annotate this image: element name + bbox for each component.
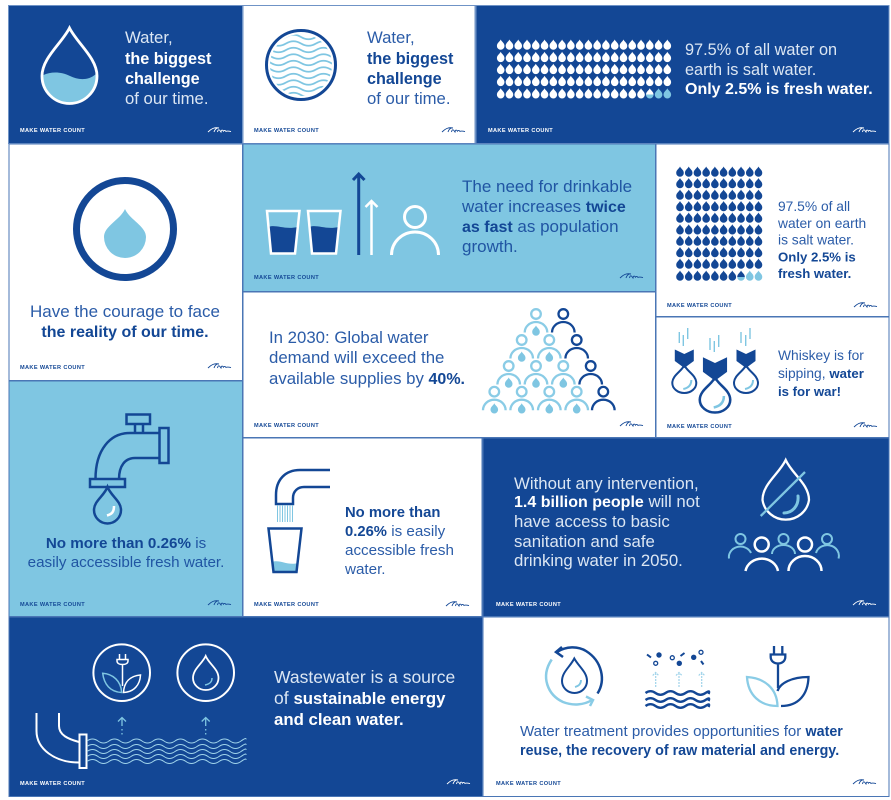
logo mark <box>853 780 876 784</box>
water waves <box>87 738 246 764</box>
logo mark <box>446 602 469 606</box>
panel: 2030 demand, white <box>243 292 656 438</box>
logo mark <box>854 303 877 307</box>
statistic text: available supplies by <box>269 369 429 388</box>
message text: water <box>805 724 843 740</box>
footer label: MAKE WATER COUNT <box>488 128 553 134</box>
statistic text: is salt water. <box>778 232 854 248</box>
logo mark <box>853 601 876 605</box>
message text: sustainable energy <box>293 689 446 708</box>
heading text: of our time. <box>125 89 208 108</box>
message text: 0.26% <box>345 524 387 540</box>
footer label: MAKE WATER COUNT <box>667 424 732 430</box>
icon: drop in circle <box>177 644 234 701</box>
statistic text: fresh water. <box>778 266 851 281</box>
message text: is easily <box>387 523 446 540</box>
icon: recycling drop <box>546 647 602 706</box>
message text: No more than <box>345 505 440 521</box>
statistic text: 97.5% of all <box>778 199 850 214</box>
message text: of <box>274 688 293 708</box>
message text: 1.4 billion people <box>514 494 644 511</box>
icon: two glasses <box>267 211 340 254</box>
message text: have access to basic <box>514 512 670 531</box>
footer label: MAKE WATER COUNT <box>254 423 319 429</box>
footer label: MAKE WATER COUNT <box>496 781 561 787</box>
statistic text: as fast <box>462 219 513 236</box>
statistic text: as population <box>513 217 619 236</box>
message text: No more than 0.26% <box>46 535 191 552</box>
message text: Without any intervention, <box>514 474 699 493</box>
logo mark <box>853 128 876 132</box>
panel: whiskey, white <box>656 317 889 438</box>
message text: sipping, <box>778 366 829 381</box>
panel: faucet, light <box>9 381 242 616</box>
footer label: MAKE WATER COUNT <box>254 602 319 608</box>
footer label: MAKE WATER COUNT <box>254 128 319 134</box>
footer label: MAKE WATER COUNT <box>20 602 85 608</box>
message text: Whiskey is for <box>778 348 864 363</box>
heading text: Water, <box>125 28 173 47</box>
icon: faucet with drop <box>90 414 168 524</box>
arrow: white short <box>366 201 378 255</box>
icon: plant and plug in circle <box>93 644 150 701</box>
panel: water drop, dark <box>8 6 242 144</box>
footer label: MAKE WATER COUNT <box>667 303 732 309</box>
statistic text: water on earth <box>777 216 866 231</box>
message text: Water treatment provides opportunities for <box>520 723 806 740</box>
arrow: dark long <box>353 174 364 255</box>
message text: Wastewater is a source <box>274 667 455 687</box>
panel: courage, white <box>9 144 242 380</box>
message text: Have the courage to face <box>30 302 220 321</box>
heading text: of our time. <box>367 89 450 108</box>
panel: drinkable water need, light <box>243 144 656 292</box>
icon: drop in ring <box>76 180 174 278</box>
logo mark <box>620 422 643 426</box>
message text: accessible fresh <box>345 542 454 559</box>
footer label: MAKE WATER COUNT <box>20 128 85 134</box>
heading text: the biggest <box>367 50 454 68</box>
panel: waves circle, white <box>243 6 475 144</box>
icon: raw material recovery <box>646 650 709 708</box>
panel: wastewater, dark <box>9 617 482 796</box>
statistic text: twice <box>586 199 626 216</box>
panel: tap and glass, white <box>243 438 482 616</box>
statistic text: 40%. <box>429 371 465 388</box>
panel: salt water tall, white <box>656 144 889 316</box>
statistic text: demand will exceed the <box>269 348 444 367</box>
logo mark <box>620 274 643 278</box>
message text: reuse, the recovery of raw material and energy. <box>520 743 839 759</box>
drop grid 100 drops <box>676 166 762 281</box>
logo mark <box>208 364 231 368</box>
icon: plant and plug <box>747 646 808 706</box>
icon: outflow pipe <box>36 713 86 768</box>
icon: person <box>392 206 438 255</box>
panel: 1.4 billion people, dark <box>483 438 889 616</box>
drop grid 100 drops <box>497 40 671 98</box>
footer label: MAKE WATER COUNT <box>20 365 85 371</box>
icon: half-full water drop <box>42 28 97 104</box>
icon: group of people <box>729 534 839 571</box>
message text: sanitation and safe <box>514 532 655 551</box>
statistic text: In 2030: Global water <box>269 328 429 347</box>
icon: circle of waves <box>265 29 337 101</box>
message text: will not <box>644 492 700 511</box>
statistic text: Only 2.5% is fresh water. <box>685 81 873 98</box>
footer label: MAKE WATER COUNT <box>20 781 85 787</box>
arrows: rising from water <box>118 718 210 737</box>
message text: the reality of our time. <box>41 324 209 341</box>
icon: falling drop bombs <box>672 328 758 413</box>
panel: salt water wide, dark <box>476 6 889 144</box>
heading text: Water, <box>367 28 415 47</box>
logo mark <box>854 423 877 427</box>
message text: water. <box>344 561 386 578</box>
statistic text: The need for drinkable <box>462 177 632 196</box>
logo mark <box>442 128 465 132</box>
panel: water treatment, white <box>483 617 889 796</box>
logo mark <box>208 128 231 132</box>
statistic text: earth is salt water. <box>685 61 816 79</box>
logo mark <box>208 601 231 605</box>
statistic text: 97.5% of all water on <box>685 41 837 59</box>
statistic text: Only 2.5% is <box>778 250 856 264</box>
chart: people triangle <box>483 309 615 414</box>
message text: water <box>828 366 864 381</box>
logo mark <box>447 780 470 784</box>
statistic text: water increases <box>461 197 586 216</box>
message text: easily accessible fresh water. <box>28 554 224 571</box>
icon: crossed-out drop <box>761 460 809 520</box>
statistic text: growth. <box>462 237 518 256</box>
footer label: MAKE WATER COUNT <box>496 602 561 608</box>
icon: tap pouring into glass <box>268 470 330 572</box>
footer label: MAKE WATER COUNT <box>254 275 319 281</box>
heading text: challenge <box>367 70 442 88</box>
heading text: challenge <box>125 70 200 88</box>
message text: is <box>191 535 207 552</box>
message text: drinking water in 2050. <box>514 551 683 570</box>
message text: and clean water. <box>274 710 404 729</box>
message text: is for war! <box>778 384 841 399</box>
heading text: the biggest <box>125 50 212 68</box>
